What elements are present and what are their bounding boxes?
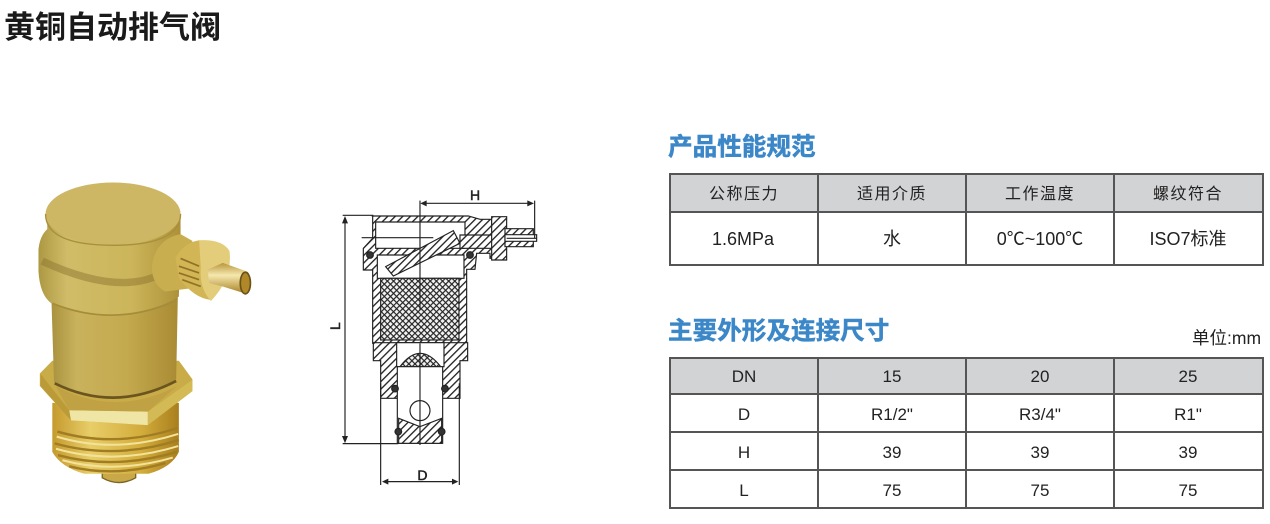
grid xyxy=(670,174,1263,265)
lower body xyxy=(51,295,178,399)
header labels xyxy=(709,180,1223,204)
row DN: 20 xyxy=(1031,367,1049,386)
row H: 39 xyxy=(1031,443,1049,462)
o-rings xyxy=(367,252,473,435)
heading: dimensions: 主要外形及连接尺寸 xyxy=(668,311,889,347)
row D xyxy=(738,405,1202,424)
header labels: 螺纹符合 xyxy=(1153,180,1223,204)
header labels: 工作温度 xyxy=(1005,180,1075,204)
row L xyxy=(739,481,1197,500)
heading: product performance: 产品性能规范 xyxy=(668,127,816,163)
header labels: 适用介质 xyxy=(857,180,927,204)
upper band xyxy=(38,214,181,316)
nozzle xyxy=(152,234,250,301)
lower body xyxy=(373,343,468,398)
row DN: DN xyxy=(732,367,756,386)
dimension letters: H xyxy=(470,187,480,203)
grid xyxy=(670,358,1263,508)
arrowheads xyxy=(342,200,534,485)
row D: R3/4" xyxy=(1019,405,1061,424)
row L: L xyxy=(739,481,749,500)
threaded section xyxy=(52,403,179,474)
hex nut xyxy=(40,361,192,425)
row L: 75 xyxy=(1031,481,1049,500)
values: ISO7标准 xyxy=(1149,229,1227,249)
inner valve stem xyxy=(397,367,443,443)
row H xyxy=(738,443,1197,462)
row H: H xyxy=(738,443,750,462)
row D: R1/2" xyxy=(871,405,913,424)
bottom tip xyxy=(102,470,136,483)
row DN: 15 xyxy=(883,367,901,386)
unit note: 单位:mm xyxy=(1192,328,1261,348)
values: 水 xyxy=(883,225,901,251)
dimension letters: L xyxy=(327,322,343,330)
dimension letters: D xyxy=(417,467,427,483)
side outlet xyxy=(460,235,503,248)
row DN: 25 xyxy=(1179,367,1197,386)
section drawing with dimensions xyxy=(327,187,537,485)
housing cap xyxy=(363,216,502,343)
header row xyxy=(670,174,1263,212)
centre and dimension lines xyxy=(343,201,537,485)
row DN xyxy=(732,367,1197,386)
title: 黄铜自动排气阀 xyxy=(4,2,221,47)
inner float dome xyxy=(400,353,441,367)
header labels: 公称压力 xyxy=(709,180,779,204)
table: performance spec xyxy=(670,174,1263,265)
dimension letters xyxy=(327,187,480,483)
values: 0℃~100℃ xyxy=(997,229,1083,249)
product photo: brass automatic air vent valve xyxy=(38,182,250,483)
row D: D xyxy=(738,405,750,424)
row H: 39 xyxy=(883,443,901,462)
valve cross-section xyxy=(363,216,537,443)
header row xyxy=(670,358,1263,394)
float mesh xyxy=(381,278,459,340)
row D: R1" xyxy=(1174,405,1202,424)
table: dimensions xyxy=(670,358,1263,508)
lever xyxy=(386,231,460,276)
cap top xyxy=(46,182,181,245)
values xyxy=(712,225,1227,251)
row L: 75 xyxy=(1179,481,1197,500)
values: 1.6MPa xyxy=(712,229,775,249)
row H: 39 xyxy=(1179,443,1197,462)
row L: 75 xyxy=(883,481,901,500)
